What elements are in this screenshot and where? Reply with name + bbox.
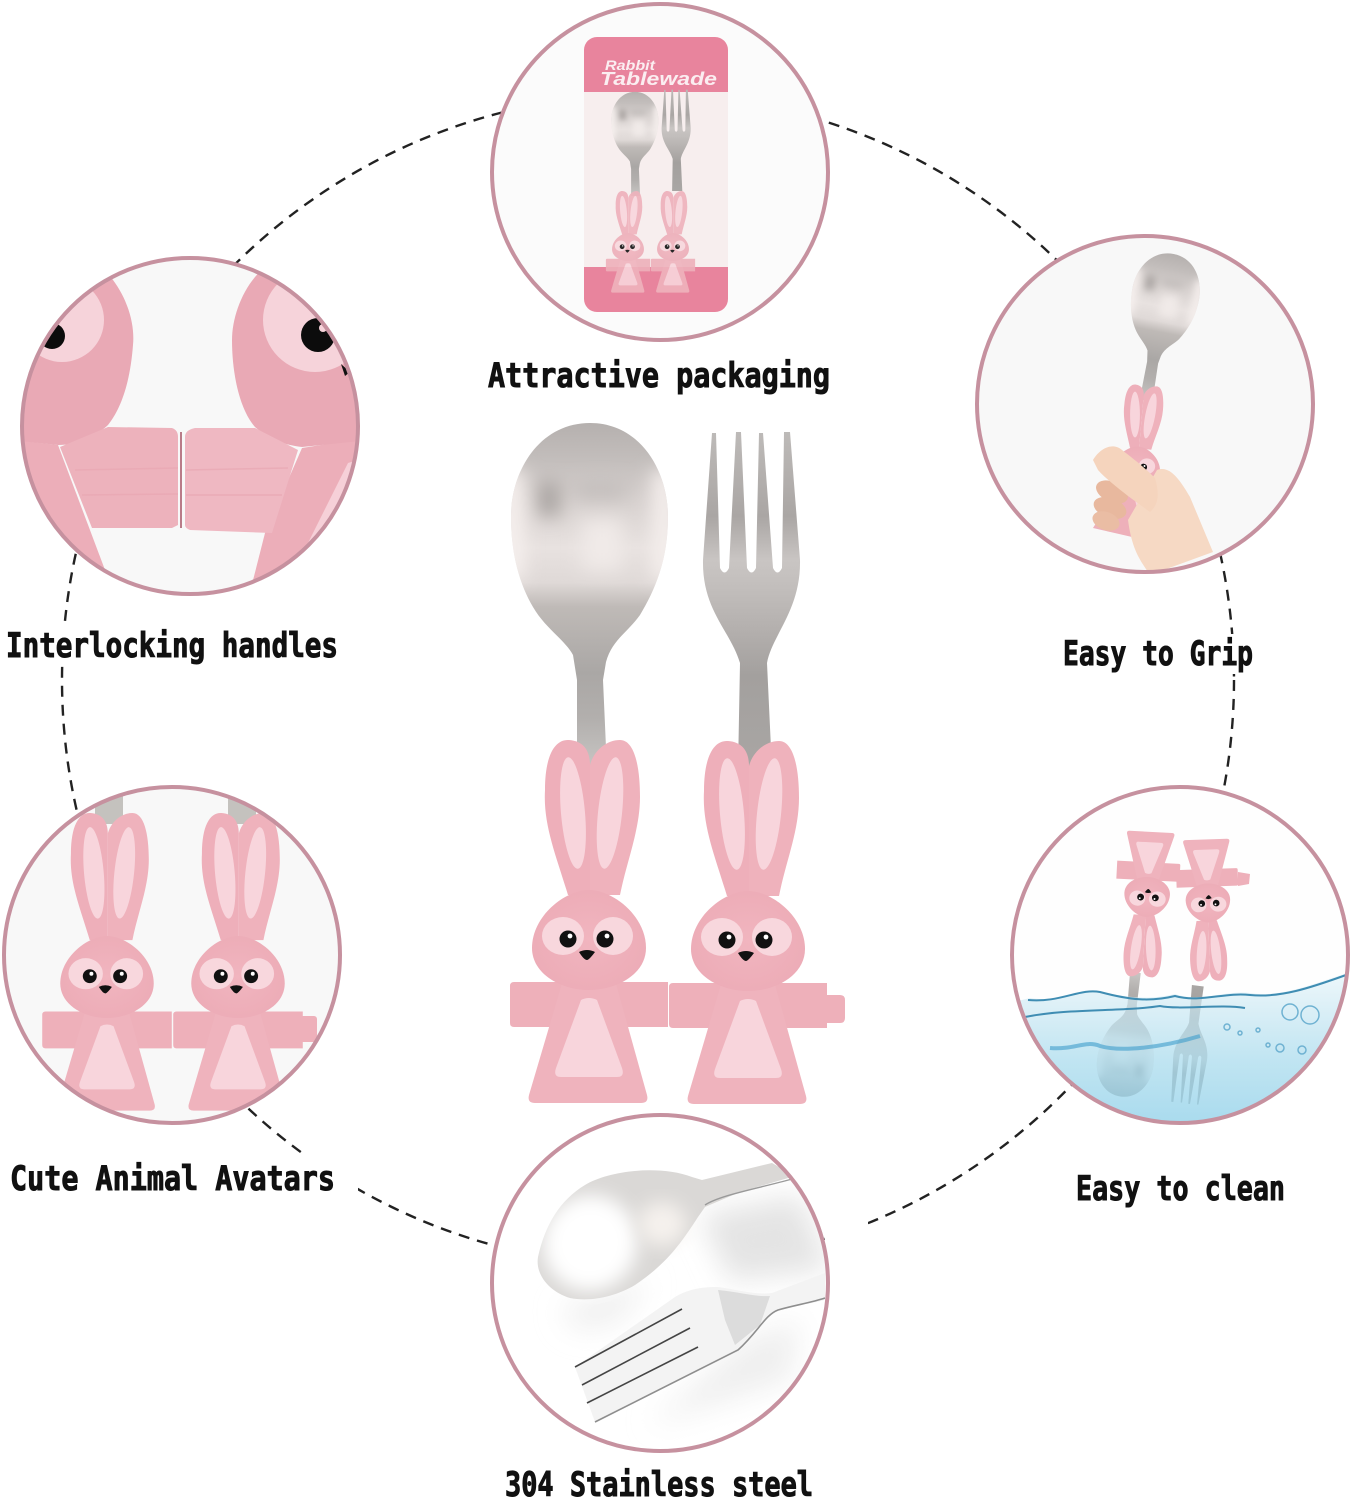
panel: stainless steel	[492, 1115, 830, 1451]
rabbit on fork	[669, 741, 845, 1104]
rabbit on spoon	[510, 740, 668, 1103]
interlocking arms	[60, 427, 298, 533]
fork	[703, 432, 800, 770]
rabbit bodies	[24, 442, 104, 568]
panel: easy to clean	[1010, 787, 1350, 1130]
panel: cute animal avatars	[4, 787, 340, 1123]
spoon held upright	[1131, 253, 1200, 400]
metal stubs	[95, 796, 123, 824]
rabbit pair	[42, 813, 317, 1111]
label: easy to clean: Easy to clean	[1076, 1169, 1285, 1209]
inverted rabbits	[1111, 830, 1182, 979]
spoon closeup	[538, 1163, 790, 1300]
hand palm	[1128, 469, 1213, 575]
panel: interlocking handles	[10, 250, 370, 600]
rabbit base under hand	[1093, 497, 1136, 537]
card title	[602, 60, 716, 85]
water	[1020, 974, 1345, 1121]
card title: Rabbit	[605, 57, 657, 73]
label: interlocking handles: Interlocking handles	[6, 626, 338, 666]
rabbit handle	[1108, 384, 1164, 532]
label: attractive packaging: Attractive packaging	[488, 356, 830, 396]
label: cute animal avatars: Cute Animal Avatars	[10, 1159, 335, 1199]
panel: easy to grip	[977, 236, 1313, 575]
panel: attractive packaging	[492, 4, 828, 340]
right rabbit head	[232, 274, 356, 447]
central product: spoon and fork	[500, 423, 845, 1104]
surface shadow	[578, 1192, 825, 1406]
dashed connecting ring	[62, 94, 1234, 1266]
label: easy to grip: Easy to Grip	[1063, 634, 1253, 674]
card title: Tablewade	[600, 69, 717, 89]
left rabbit head	[24, 279, 134, 445]
spoon	[500, 423, 676, 770]
hand fingers	[1092, 446, 1154, 531]
packaging card	[584, 37, 728, 312]
fork closeup	[575, 1273, 825, 1422]
submerged spoon	[1097, 973, 1152, 1097]
submerged fork	[1171, 985, 1208, 1104]
